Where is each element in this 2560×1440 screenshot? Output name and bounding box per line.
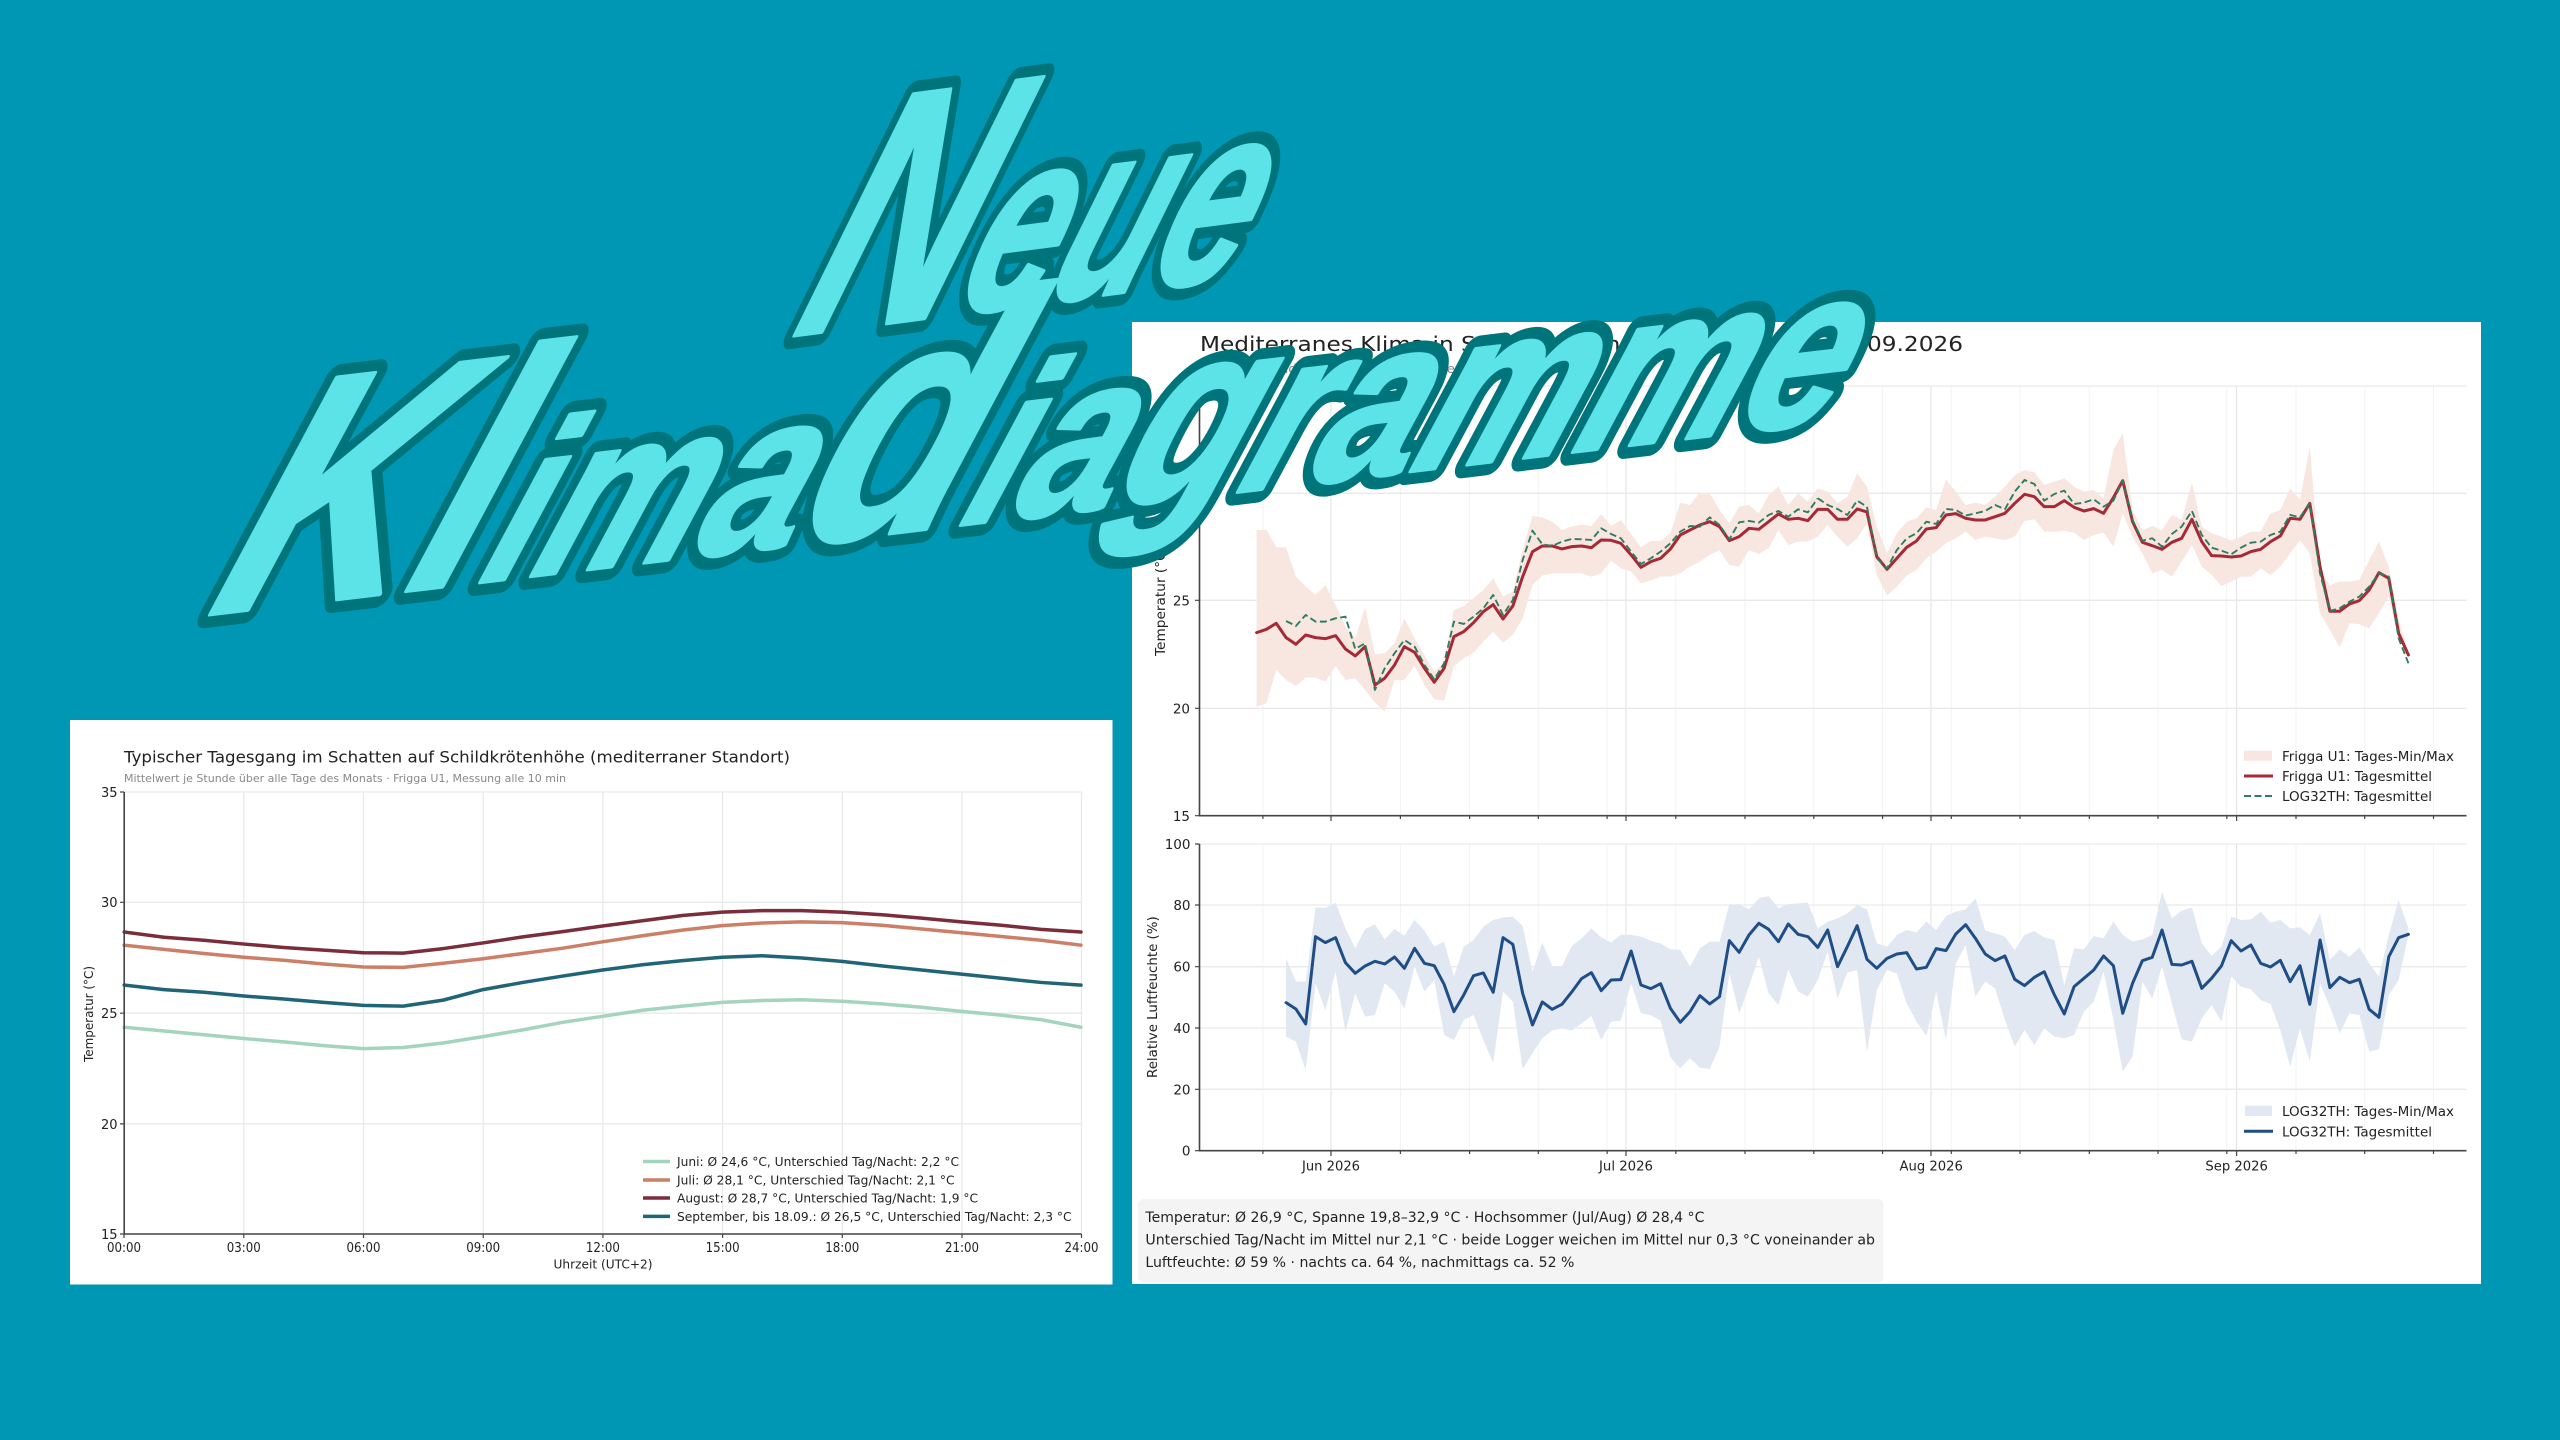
title: Neue Klimadiagramme: Klimadiagramme <box>177 116 1952 687</box>
panel: daily cycle chart <box>70 720 1112 1284</box>
line: Frigga U1 daily mean <box>1257 481 2408 685</box>
y axis title: temperature: Temperatur (°C) <box>1154 546 1169 657</box>
text: daily cycle subtitle: Mittelwert je Stunde über alle Tage des Monats · Frigga U1, Messung alle 10 min <box>124 772 566 785</box>
x axis labels: 00:00 <box>107 1241 141 1256</box>
x axis labels: 15:00 <box>706 1241 740 1256</box>
x axis labels: months: Jul 2026 <box>1598 1159 1653 1175</box>
legend: humidity: LOG32TH: Tages-Min/Max <box>2282 1104 2454 1120</box>
x axis title: Uhrzeit (UTC+2) <box>554 1256 652 1272</box>
x axis labels: 21:00 <box>945 1241 979 1256</box>
x axis labels <box>107 1241 1098 1256</box>
y axis labels: humidity: 100 <box>1165 837 1190 853</box>
band: LOG32TH min/max <box>1286 892 2408 1072</box>
x axis labels: 09:00 <box>466 1241 500 1256</box>
y axis labels: 35 <box>101 786 118 801</box>
title: Neue Klimadiagramme: Klimadiagramme <box>177 116 1952 687</box>
panel: seasonal climate chart <box>1132 322 2481 1284</box>
legend: temperature: Frigga U1: Tagesmittel <box>2282 769 2432 785</box>
y axis labels: 25 <box>101 1007 118 1022</box>
legend: months: Juli: Ø 28,1 °C, Unterschied Tag/Nacht: 2,1 °C <box>676 1172 955 1188</box>
callout: statistics summary: Unterschied Tag/Nacht im Mittel nur 2,1 °C · beide Logger weichen im Mittel nur 0,3 °C voneinander ab <box>1145 1233 1875 1249</box>
legend: months <box>643 1154 1072 1224</box>
legend: temperature: Frigga U1: Tages-Min/Max <box>2282 749 2454 765</box>
x axis labels: months: Aug 2026 <box>1900 1159 1963 1175</box>
callout: statistics summary: Luftfeuchte: Ø 59 % · nachts ca. 64 %, nachmittags ca. 52 % <box>1145 1255 1574 1271</box>
title: Neue Klimadiagramme: Neue <box>763 0 1353 409</box>
y axis title: humidity: Relative Luftfeuchte (%) <box>1146 916 1161 1078</box>
y axis labels: humidity: 60 <box>1173 960 1190 976</box>
text: seasonal chart subtitle: Frigga U1 und LOG32TH, Tageswerte <box>1200 362 1455 376</box>
x axis labels: months: Sep 2026 <box>2205 1159 2268 1175</box>
legend: humidity <box>2244 1104 2454 1140</box>
x axis labels: 12:00 <box>586 1241 620 1256</box>
legend: months: September, bis 18.09.: Ø 26,5 °C, Unterschied Tag/Nacht: 2,3 °C <box>677 1209 1072 1224</box>
x axis labels: months: Jun 2026 <box>1301 1159 1360 1175</box>
y axis labels: temperature: 20 <box>1173 702 1190 718</box>
title: Neue Klimadiagramme: Neue <box>763 0 1353 409</box>
y axis labels: temperature: 30 <box>1173 486 1190 502</box>
line chart: hourly temperature by month <box>124 911 1081 1049</box>
y axis labels: temperature: 25 <box>1173 594 1190 610</box>
y axis labels: temperature: 35 <box>1173 379 1190 395</box>
callout: statistics summary <box>1138 1199 1884 1283</box>
line: LOG32TH daily mean (dashed) <box>1286 480 2408 690</box>
y axis labels: humidity: 80 <box>1173 898 1190 914</box>
heading: seasonal chart title: Mediterranes Klima in Schildkrötenhöhe · 24.05.2026–18.09.2026 <box>1200 332 1963 356</box>
y axis labels: humidity: 40 <box>1173 1021 1190 1037</box>
x axis labels: 24:00 <box>1064 1241 1098 1256</box>
legend: humidity: LOG32TH: Tagesmittel <box>2282 1124 2432 1140</box>
line: LOG32TH humidity daily mean <box>1286 923 2408 1025</box>
y axis labels: humidity: 0 <box>1182 1144 1190 1160</box>
x axis labels: 06:00 <box>346 1241 380 1256</box>
title: Neue Klimadiagramme <box>177 0 1952 687</box>
callout: statistics summary: Temperatur: Ø 26,9 °C, Spanne 19,8–32,9 °C · Hochsommer (Jul/Aug) Ø 28,4 °C <box>1144 1210 1705 1226</box>
y axis labels <box>101 786 118 1243</box>
x axis labels: 03:00 <box>227 1241 261 1256</box>
y axis labels: humidity: 20 <box>1173 1082 1190 1098</box>
heading: daily cycle title: Typischer Tagesgang im Schatten auf Schildkrötenhöhe (mediterraner Standort) <box>123 748 790 766</box>
y axis title: Temperatur (°C) <box>81 966 96 1063</box>
y axis labels: humidity <box>1165 837 1190 1160</box>
chart: temperature <box>1154 379 2466 825</box>
x axis labels: months <box>1301 1159 2268 1175</box>
y axis labels: 15 <box>101 1228 118 1243</box>
chart: relative humidity <box>1146 837 2466 1175</box>
y axis labels: 30 <box>101 896 118 911</box>
x axis labels: 18:00 <box>825 1241 859 1256</box>
legend: temperature <box>2244 749 2454 805</box>
y axis labels: temperature <box>1173 379 1190 825</box>
y axis labels: 20 <box>101 1118 118 1133</box>
legend: months: August: Ø 28,7 °C, Unterschied Tag/Nacht: 1,9 °C <box>677 1190 978 1206</box>
legend: temperature: LOG32TH: Tagesmittel <box>2282 789 2432 805</box>
legend: months: Juni: Ø 24,6 °C, Unterschied Tag/Nacht: 2,2 °C <box>676 1154 959 1169</box>
band: Frigga U1 min/max <box>1257 433 2408 712</box>
y axis labels: temperature: 15 <box>1173 809 1190 825</box>
